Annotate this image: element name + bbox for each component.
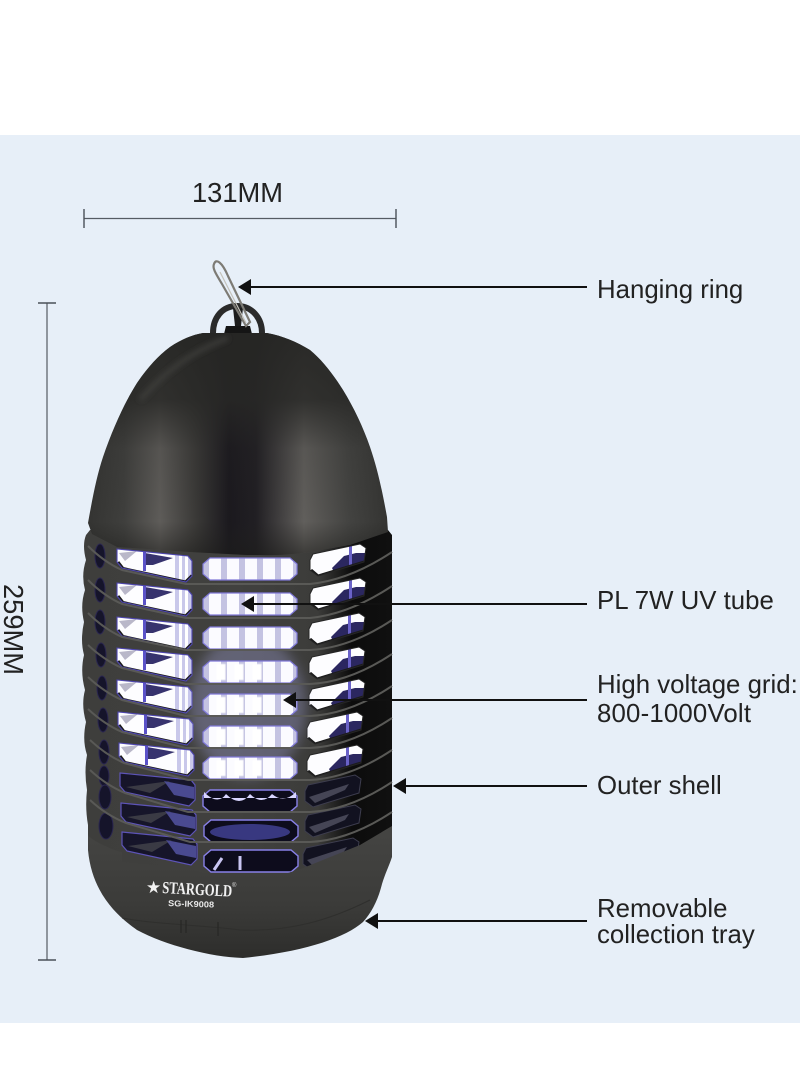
brand label: STARGOLD <box>162 878 233 901</box>
label: outer shell: Outer shell <box>597 772 722 800</box>
rib highlights <box>88 546 392 842</box>
brand label: SG-IK9008 <box>168 898 215 910</box>
brand label: ® <box>232 882 237 889</box>
tube highlight <box>221 664 257 776</box>
label: high voltage grid: 800-1000Volt <box>597 700 751 728</box>
arrow: outer shell <box>393 778 587 794</box>
label: UV tube: PL 7W UV tube <box>597 587 774 615</box>
brand label <box>146 878 237 910</box>
width dimension: 131MM: 131MM <box>192 177 283 208</box>
brand label: ★ <box>146 878 161 897</box>
arrow: hanging ring <box>238 279 587 295</box>
product: bug zapper lamp <box>82 261 392 958</box>
label: collection tray: Removable <box>597 895 727 923</box>
icon: hanging ring <box>213 261 262 334</box>
label: hanging ring: Hanging ring <box>597 276 743 304</box>
slots: right column <box>303 544 368 872</box>
arrow: collection tray <box>365 913 587 929</box>
arrow: high voltage grid <box>283 692 587 708</box>
base: removable collection tray <box>88 826 392 958</box>
height dimension: 259MM <box>0 303 56 960</box>
label: high voltage grid <box>597 671 798 728</box>
top dome <box>88 333 388 555</box>
width dimension: 131MM <box>84 177 396 228</box>
label: high voltage grid: High voltage grid: <box>597 671 798 699</box>
arrow: UV tube <box>241 596 587 612</box>
UV tube seen through the centre slots <box>190 558 306 872</box>
label: collection tray: collection tray <box>597 921 755 949</box>
outer shell cage <box>82 530 392 880</box>
side slots on the left edge <box>95 544 113 839</box>
slots: left column <box>117 549 198 866</box>
label: collection tray <box>597 895 755 949</box>
